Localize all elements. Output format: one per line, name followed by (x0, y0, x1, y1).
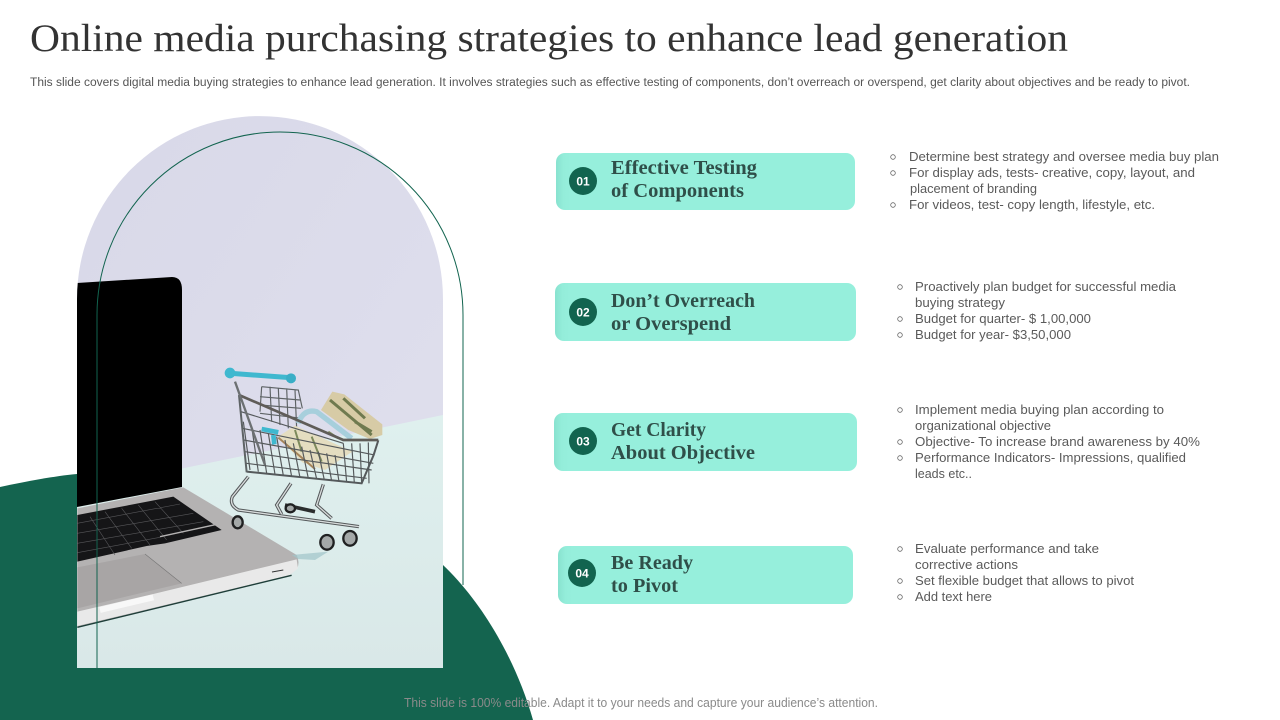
card 03: get clarity (554, 413, 857, 471)
card 01 number badge (569, 167, 597, 195)
bullet list 03 (898, 403, 1200, 481)
card 03 number badge (569, 427, 597, 455)
card 04 number badge (568, 559, 596, 587)
bullet list 04: Evaluate performance and take (915, 542, 1099, 556)
card 04 heading: to Pivot (611, 575, 678, 597)
bullet list 03: organizational objective (915, 419, 1051, 433)
card 02 number badge (569, 298, 597, 326)
card 01 heading (611, 157, 758, 202)
title: Online media purchasing strategies to enhance lead generation (30, 17, 1068, 60)
bullet list 02: Budget for quarter- $ 1,00,000 (915, 312, 1091, 326)
cart shadow (292, 552, 328, 560)
basket rim (239, 395, 378, 440)
card 01 number badge: 01 (576, 174, 590, 188)
card 02: don't overreach (555, 283, 856, 341)
background green blob (0, 474, 533, 720)
bullet list 02: Budget for year- $3,50,000 (915, 328, 1071, 342)
card 03 heading: Get Clarity (611, 419, 707, 441)
card 02 background (555, 283, 856, 341)
card 04 number badge: 04 (575, 566, 589, 580)
card 03 heading: About Objective (611, 442, 755, 464)
laptop base (77, 487, 298, 627)
cart wheels (233, 504, 357, 550)
card 03 heading (611, 419, 755, 464)
card 04: be ready (558, 546, 853, 604)
cart frame (231, 477, 359, 527)
money roll back (321, 392, 382, 439)
card 04 heading (611, 552, 694, 597)
cart frame highlight (231, 477, 359, 527)
card 01: effective testing (556, 153, 855, 210)
bullet list 01: For display ads, tests- creative, copy, layout, and (909, 166, 1195, 180)
lower dark bar (285, 505, 315, 512)
card 04 heading: Be Ready (611, 552, 694, 574)
basket wires (241, 412, 378, 484)
bullet list 01: placement of branding (910, 182, 1037, 196)
card 02 heading (611, 290, 756, 335)
shopping cart with money (225, 368, 382, 560)
card 03 number badge: 03 (576, 434, 590, 448)
blue clip (298, 411, 352, 438)
bullet list 04: corrective actions (915, 558, 1018, 572)
card 02 heading: Don’t Overreach (611, 290, 756, 312)
subtitle description: This slide covers digital media buying strategies to enhance lead generation. It involves strategies such as effective testing of components, don’t overreach or overspend, get clarity about objectives and be ready to pivot. (30, 77, 1190, 89)
card 01 background (556, 153, 855, 210)
back basket wires (260, 387, 302, 428)
bullet list 03: Implement media buying plan according to (915, 403, 1164, 417)
bullet list 02: Proactively plan budget for successful media (915, 280, 1176, 294)
bullet list 03: Performance Indicators- Impressions, qualified (915, 451, 1186, 465)
money roll front (278, 426, 352, 470)
bullet list 01: Determine best strategy and oversee media buy plan (909, 150, 1219, 164)
bullet list 02: buying strategy (915, 296, 1006, 310)
bullet list 02 (898, 280, 1176, 342)
bullet list 01 (891, 150, 1219, 212)
card 02 number badge: 02 (576, 306, 590, 320)
bullet list 01: For videos, test- copy length, lifestyle, etc. (909, 198, 1155, 212)
card 01 heading: of Components (611, 180, 744, 202)
bullet list 03: leads etc.. (915, 467, 972, 481)
bullet list 04 (898, 542, 1135, 604)
laptop screen (77, 277, 182, 507)
photo table surface (77, 415, 443, 668)
cart handle (225, 368, 296, 444)
footer note: This slide is 100% editable. Adapt it to your needs and capture your audience’s attention. (404, 696, 878, 710)
bullet list 04: Add text here (915, 590, 992, 604)
bullet list 03: Objective- To increase brand awareness by 40% (915, 435, 1200, 449)
bullet list 04: Set flexible budget that allows to pivot (915, 574, 1135, 588)
thin arch outline (97, 132, 463, 668)
card 01 heading: Effective Testing (611, 157, 758, 179)
card 02 heading: or Overspend (611, 313, 732, 335)
card 04 background (558, 546, 853, 604)
card 03 background (554, 413, 857, 471)
photo: laptop and shopping cart in arch (77, 116, 443, 668)
photo wall (77, 116, 443, 468)
